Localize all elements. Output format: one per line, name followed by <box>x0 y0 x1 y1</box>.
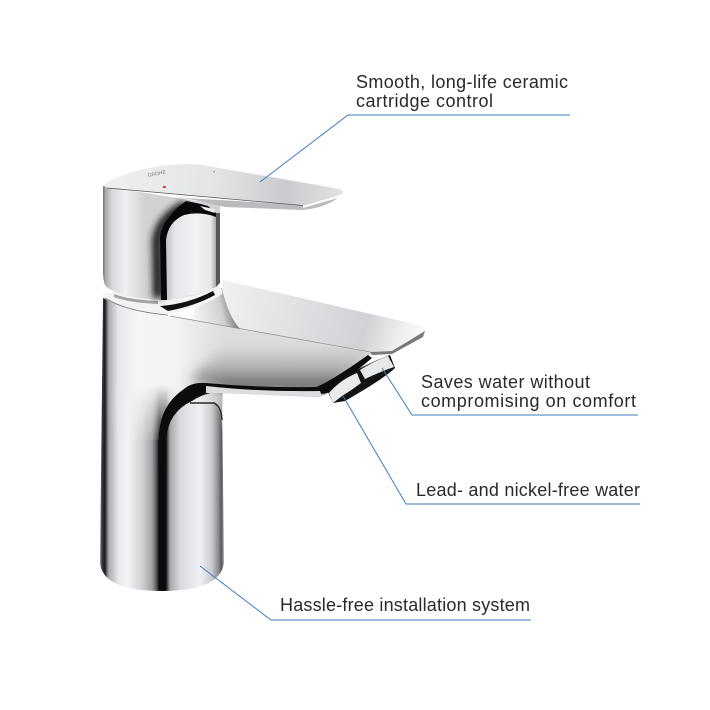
spout neck <box>190 288 240 329</box>
label: Smooth, long-life ceramic <box>356 72 568 92</box>
leader line <box>343 396 640 504</box>
spout tip edge <box>370 331 425 355</box>
label: Hassle-free installation system <box>280 595 530 615</box>
label: Saves water without <box>421 372 590 392</box>
leader line <box>260 115 570 182</box>
faucet body and spout front <box>103 298 372 440</box>
spout underside reflection <box>206 386 322 396</box>
callout: lead- and nickel-free <box>343 396 640 504</box>
label: Lead- and nickel-free water <box>416 480 640 500</box>
cold mark <box>213 171 215 172</box>
dark arch edge <box>159 355 372 470</box>
callout: ceramic cartridge <box>260 72 570 182</box>
spout top plate <box>222 280 426 352</box>
handle concave dark edge <box>160 201 216 300</box>
callout: saves water: compromising on comfort <box>421 391 636 411</box>
hot mark <box>163 186 166 188</box>
callout: saves water <box>382 368 638 415</box>
handle concave <box>165 212 216 300</box>
handle shadow <box>157 205 186 298</box>
leader line <box>200 566 531 620</box>
column inner arch <box>166 403 222 470</box>
callout: ceramic cartridge: cartridge control <box>356 91 493 111</box>
leader line <box>382 368 638 415</box>
callout: installation <box>200 566 531 620</box>
base ring <box>103 284 222 315</box>
spout front shading <box>190 350 372 392</box>
faucet illustration <box>100 164 426 591</box>
spout lower edge line <box>170 316 370 352</box>
faucet column <box>100 300 224 591</box>
handle body <box>103 186 220 300</box>
lever <box>103 164 343 210</box>
aerator <box>328 355 395 403</box>
logo text: GROHE <box>147 169 167 179</box>
